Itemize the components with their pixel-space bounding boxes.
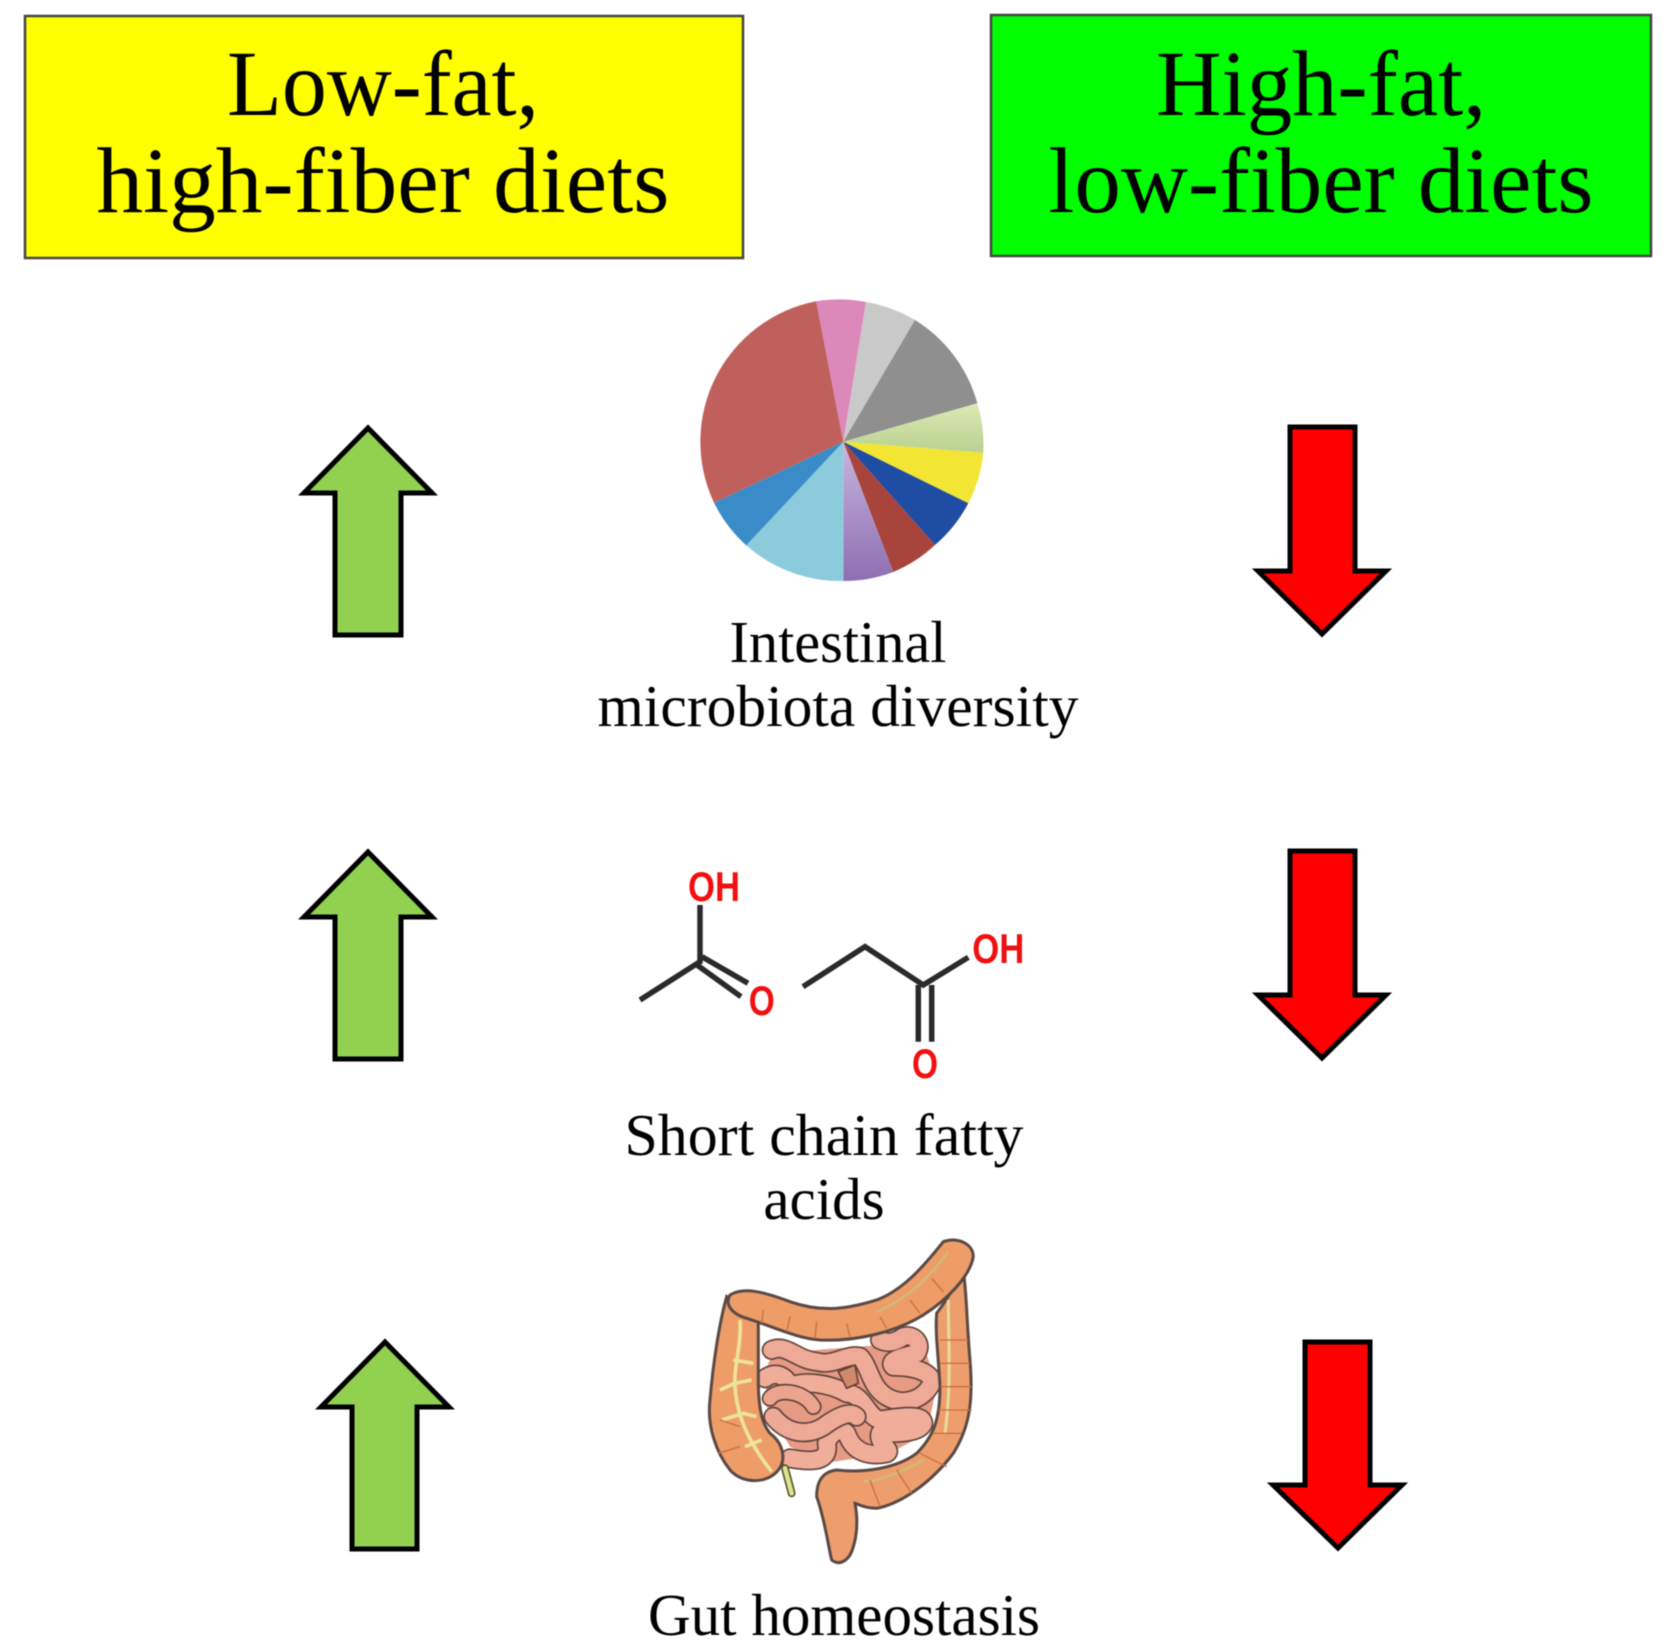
arrow: up, gut homeostasis <box>321 1342 449 1549</box>
label: gut homeostasis: Gut homeostasis <box>648 1582 1040 1648</box>
label: intestinal microbiota diversity: microbiota diversity <box>598 673 1079 739</box>
colon stripes <box>720 1300 949 1472</box>
transverse colon <box>728 1240 973 1340</box>
label: short chain fatty acids: acids <box>763 1166 885 1232</box>
icon: microbiota pie chart <box>700 299 984 581</box>
arrow: down, gut homeostasis <box>1273 1342 1402 1548</box>
label: short chain fatty acids: Short chain fatty <box>624 1102 1024 1168</box>
arrow: down, fatty acids <box>1258 851 1386 1058</box>
icon: short chain fatty acid molecules: O <box>912 1040 938 1087</box>
icon: short chain fatty acid molecules: O <box>749 977 775 1024</box>
panel: high-fat, low-fiber diets heading: High-fat, <box>1156 33 1486 136</box>
icon: intestines <box>709 1240 973 1563</box>
panel: low-fat, high-fiber diets heading: high-fiber diets <box>96 130 670 233</box>
icon: short chain fatty acid molecules <box>640 863 1024 1087</box>
icon: short chain fatty acid molecules: OH <box>972 925 1024 972</box>
arrow: up, diversity <box>304 428 432 635</box>
arrow: up, fatty acids <box>304 852 432 1059</box>
label: intestinal microbiota diversity: Intestinal <box>730 609 946 675</box>
small intestine <box>765 1336 937 1463</box>
descending colon and rectum <box>817 1270 971 1563</box>
panel: high-fat, low-fiber diets heading <box>991 15 1651 256</box>
label: short chain fatty acids <box>624 1102 1024 1232</box>
panel: low-fat, high-fiber diets heading <box>25 16 743 258</box>
panel: low-fat, high-fiber diets heading: Low-fat, <box>227 33 539 136</box>
label: intestinal microbiota diversity <box>598 609 1079 739</box>
arrow: down, diversity <box>1258 427 1386 634</box>
appendix <box>785 1468 792 1493</box>
icon: short chain fatty acid molecules: OH <box>688 863 740 910</box>
ascending colon <box>709 1297 783 1481</box>
panel: high-fat, low-fiber diets heading: low-fiber diets <box>1048 130 1594 233</box>
